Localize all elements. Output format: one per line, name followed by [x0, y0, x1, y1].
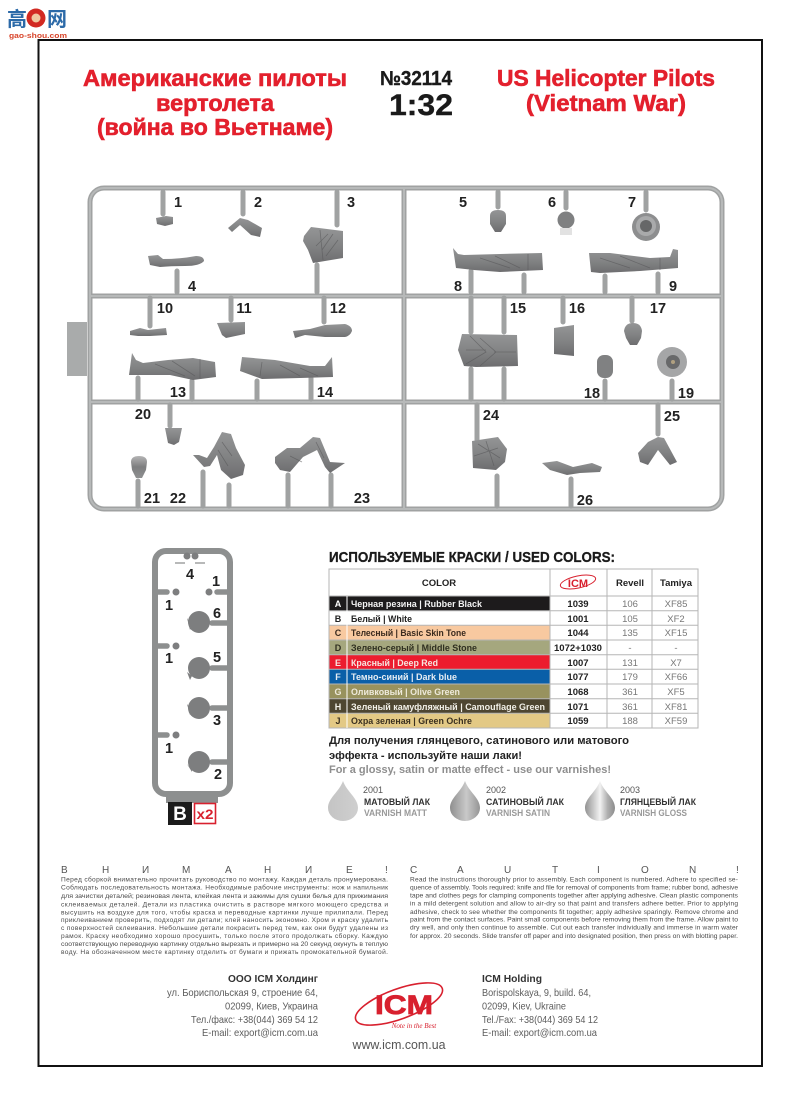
row B: [335, 614, 685, 625]
row G: XF5: [667, 687, 685, 698]
caution text: Russian: соответствующую переводную картинку отдельно вырезать и примерно на 20 секунд окунуть в теплую: [61, 941, 388, 948]
sprue letter B: B: [173, 804, 187, 825]
part numbers on main sprue: 10: [157, 301, 173, 317]
part numbers on main sprue: 17: [650, 301, 666, 317]
table header: ICM: [568, 578, 588, 590]
watermark logo: 高: [7, 7, 27, 31]
varnish satin: 2002: [486, 785, 506, 795]
row D: Зелено-серый | Middle Stone: [351, 643, 477, 654]
row H: [335, 702, 687, 713]
part 6 helmet: [558, 212, 574, 235]
row H: Зеленый камуфляжный | Camouflage Green: [351, 702, 545, 713]
varnish note: For a glossy, satin or matte effect - use our varnishes!: [329, 764, 611, 776]
caution text: English: I: [597, 865, 600, 876]
row D: -: [674, 643, 678, 654]
part numbers on main sprue: 15: [510, 301, 526, 317]
part 14 leg: [240, 357, 333, 379]
row H: XF81: [665, 702, 687, 713]
row A: [335, 599, 687, 610]
caution text: English: quence of assembly. Tools required: knife and file for removal of components from frame; rubber bond, adhesive: [410, 884, 738, 892]
part numbers on main sprue: 3: [347, 195, 355, 211]
sprue B: 5: [213, 650, 221, 666]
part 16 torso panel: [554, 325, 574, 356]
row J: Охра зеленая | Green Ochre: [351, 716, 472, 727]
row E: 131: [622, 658, 638, 669]
used colors heading: ИСПОЛЬЗУЕМЫЕ КРАСКИ / USED COLORS:: [329, 550, 615, 566]
part 7 hat: [632, 213, 660, 241]
caution text: Russian: !: [385, 865, 388, 876]
caution text: Russian: М: [182, 865, 190, 876]
table header: Revell: [616, 578, 644, 589]
title: Russian: Американские пилоты: [83, 65, 347, 91]
row H: 1071: [567, 702, 589, 713]
address: Russian: 02099, Киев, Украина: [225, 1000, 318, 1012]
caution text: Russian: И: [305, 865, 312, 876]
part numbers on main sprue: 22: [170, 491, 186, 507]
row F: 1077: [567, 672, 589, 683]
row C: Телесный | Basic Skin Tone: [351, 628, 466, 639]
caution text: Russian: приклеиванием проверить, подходят ли детали; клей наносить экономно. Хром и краску удалить: [61, 916, 389, 924]
part 25 arm: [638, 437, 677, 465]
address: English: ICM Holding: [482, 973, 542, 985]
part numbers on main sprue: 18: [584, 386, 600, 402]
part 19 hat: [657, 347, 687, 377]
title: English: [497, 65, 715, 116]
table header: COLOR: [422, 578, 456, 589]
part numbers on main sprue: 20: [135, 407, 151, 423]
row E: Красный | Deep Red: [351, 658, 438, 669]
varnish matt: VARNISH MATT: [364, 808, 427, 819]
varnish matt: [328, 781, 430, 821]
row H: H: [335, 702, 341, 712]
sprue B: 1: [165, 651, 173, 667]
sprue gates: [138, 192, 672, 506]
row H: 361: [622, 702, 638, 713]
caution text: English: T: [552, 865, 558, 876]
part numbers on main sprue: 21: [144, 491, 160, 507]
row D: [335, 643, 678, 654]
title: English: US Helicopter Pilots: [497, 65, 715, 91]
row F: XF66: [665, 672, 687, 683]
caution text: English: N: [689, 865, 696, 876]
part 24 torso: [472, 437, 507, 470]
part 5 head: [490, 210, 506, 232]
part numbers on main sprue: 2: [254, 195, 262, 211]
part numbers on main sprue: 6: [548, 195, 556, 211]
row D: 1072+1030: [554, 643, 602, 654]
address: Russian: E-mail: export@icm.com.ua: [202, 1027, 318, 1039]
part numbers on main sprue: 23: [354, 491, 370, 507]
title: Russian: [83, 65, 347, 140]
row A: A: [335, 599, 342, 609]
caution text: Russian: воду. На обозначенном месте картинку отделить от бумаги и прижать промокательной бумагой.: [61, 948, 388, 956]
part numbers on main sprue: 19: [678, 386, 694, 402]
row A: XF85: [665, 599, 687, 610]
row C: 135: [622, 628, 638, 639]
row J: J: [335, 716, 341, 726]
ICM logo: Note in the Best: [391, 1022, 437, 1030]
part 8 leg: [453, 248, 543, 272]
quantity x2: [194, 804, 216, 824]
varnish matt: МАТОВЫЙ ЛАК: [364, 796, 430, 808]
row G: Оливковый | Olive Green: [351, 687, 460, 698]
row A: 1039: [567, 599, 589, 610]
watermark logo: [7, 7, 67, 40]
row G: 1068: [567, 687, 589, 698]
part 15 torso: [458, 334, 518, 367]
row B: 105: [622, 614, 638, 625]
address: English: Borispolskaya, 9, build. 64,: [482, 987, 591, 999]
row F: Темно-синий | Dark blue: [351, 672, 457, 683]
part numbers on main sprue: 4: [188, 279, 196, 295]
caution text: English: C: [410, 865, 417, 876]
part numbers on main sprue: 9: [669, 279, 677, 295]
caution text: English: dry well, and only then continue to assemble. Cut out each transfer individually and immerse in warm water: [410, 924, 739, 932]
part 2 arm: [228, 218, 262, 237]
caution text: Russian: Соблюдать последовательность монтажа. Необходимые рабочие инструменты: нож и напильник: [61, 884, 388, 892]
caution text: Russian: Н: [264, 865, 271, 876]
row C: [335, 628, 687, 639]
address: Russian: ул. Бориспольская 9, строение 64,: [167, 987, 318, 999]
ICM logo: ICM: [375, 990, 433, 1020]
part 11 cuff: [217, 322, 245, 338]
caution text: Russian: Перед сборкой внимательно прочитать руководство по монтажу. Каждая деталь пронумерована.: [61, 876, 388, 884]
caution text: English: Read the instructions thoroughly prior to assembly. Each component is numbered. Adhere to specified se-: [410, 876, 738, 884]
caution text: Russian: с поверхностей склеивания. Небольшие детали покрасить перед тем, как они будут удалены из: [61, 924, 388, 932]
watermark logo: 网: [47, 9, 67, 31]
title: Russian: (война во Вьетнаме): [97, 114, 333, 140]
title: kit number and scale: [380, 68, 453, 122]
title: kit number and scale: №32114: [380, 68, 453, 90]
ICM logo: [351, 974, 447, 1034]
caution text: English: O: [641, 865, 649, 876]
sprue B: 1: [165, 598, 173, 614]
caution text: Russian: склеиваемых деталей. Детали из пластика очистить в растворе мягкого моющего средства и: [61, 900, 388, 908]
row E: [335, 658, 682, 669]
part 18 helmet: [597, 355, 613, 378]
part 17 head: [624, 323, 642, 345]
part 4 arm: [148, 255, 204, 267]
caution text: English: adhesive, check to see whether the components fit together; apply adhesive sparingly. Remove chrome and: [410, 909, 738, 916]
row J: 1059: [567, 716, 589, 727]
address: English: E-mail: export@icm.com.ua: [482, 1027, 597, 1039]
quantity x2: x2: [196, 806, 214, 822]
row E: E: [335, 658, 341, 668]
part numbers on main sprue: 8: [454, 279, 462, 295]
website: www.icm.com.ua: [352, 1037, 446, 1052]
caution text: English: paint from the contact surfaces. Paint small components before removing them from the frame. Allow paint to: [410, 916, 738, 924]
row E: 1007: [567, 658, 589, 669]
sprue B: 3: [213, 713, 221, 729]
row D: D: [335, 643, 342, 653]
row G: G: [334, 687, 342, 697]
part 10 hand and forearm: [130, 328, 167, 336]
sprue B: 4: [186, 567, 194, 583]
row C: XF15: [665, 628, 687, 639]
sprue B: [155, 551, 230, 825]
sprue B: 1: [212, 574, 220, 590]
row B: Белый | White: [351, 614, 412, 625]
part numbers on main sprue: [135, 195, 694, 509]
part numbers on main sprue: 26: [577, 493, 593, 509]
caution text: English: !: [736, 865, 739, 876]
address: English: 02099, Kiev, Ukraine: [482, 1000, 566, 1012]
address: Russian: Тел./факс: +38(044) 369 54 12: [191, 1014, 318, 1026]
part numbers on main sprue: 24: [483, 408, 499, 424]
part numbers on main sprue: 13: [170, 385, 186, 401]
title: kit number and scale: 1:32: [389, 89, 453, 122]
row B: B: [335, 614, 342, 624]
part numbers on main sprue: 1: [174, 195, 182, 211]
watermark logo: gao-shou.com: [9, 31, 67, 40]
varnish satin: VARNISH SATIN: [486, 808, 550, 819]
address: English: [482, 973, 598, 1039]
varnish gloss: VARNISH GLOSS: [620, 808, 687, 819]
table header: [422, 572, 693, 592]
row D: -: [628, 643, 632, 654]
part 26 arm: [542, 461, 602, 475]
caution text: Russian: И: [142, 865, 149, 876]
varnish gloss: ГЛЯНЦЕВЫЙ ЛАК: [620, 796, 696, 808]
varnish matt: 2001: [363, 785, 383, 795]
caution text: English: U: [504, 865, 511, 876]
caution text: Russian: для зачистки деталей; резиновая лента, клейкая лента и зажимы для сушки белья для прижимания: [61, 892, 388, 900]
caution text: English: tape and clothes pegs for clamping components together after applying adhesive. Clean plastic components: [410, 892, 739, 900]
part 13 leg: [129, 353, 216, 380]
varnish gloss: [585, 781, 696, 821]
part numbers on main sprue: 25: [664, 409, 680, 425]
part 21 helmet: [131, 456, 147, 478]
caution text: Russian: Е: [346, 865, 353, 876]
part 9 leg: [589, 249, 678, 273]
caution text: Russian: Н: [102, 865, 109, 876]
address: Russian: ООО ICM Холдинг: [228, 973, 319, 985]
part 3 torso: [303, 227, 343, 263]
caution text: English: [410, 865, 739, 940]
row B: 1001: [567, 614, 589, 625]
sprue B: 6: [213, 606, 221, 622]
varnish note: эффекта - используйте наши лаки!: [329, 750, 522, 762]
main sprue frame: [67, 188, 722, 509]
row G: [334, 687, 685, 698]
row J: XF59: [665, 716, 687, 727]
part numbers on main sprue: 12: [330, 301, 346, 317]
part numbers on main sprue: 5: [459, 195, 467, 211]
part 1 hand: [156, 216, 173, 226]
row F: F: [335, 672, 341, 682]
varnish note: [329, 735, 629, 776]
sprue letter B: [168, 802, 192, 825]
caution text: Russian: высушить на воздухе для того, чтобы краска и переводные картинки лучше прилипали. Перед: [61, 908, 388, 916]
caution text: Russian: А: [225, 865, 232, 876]
part numbers on main sprue: 11: [236, 301, 252, 317]
part 23 seated legs: [275, 437, 345, 473]
part numbers on main sprue: 16: [569, 301, 585, 317]
table header: Tamiya: [660, 578, 693, 589]
caution text: Russian: [61, 865, 389, 956]
title: Russian: вертолета: [156, 90, 274, 116]
sprue B: 1: [165, 741, 173, 757]
row A: Черная резина | Rubber Black: [351, 599, 483, 610]
caution text: English: in a mild detergent solution and allow to air-dry so that paint and transfers adhere better. Prior to applying: [410, 900, 738, 908]
part 12 arm: [293, 324, 352, 338]
varnish note: Для получения глянцевого, сатинового или матового: [329, 735, 629, 747]
part numbers on main sprue: 7: [628, 195, 636, 211]
address: Russian: [167, 973, 319, 1039]
row B: XF2: [667, 614, 685, 625]
part 22 seated legs: [193, 432, 245, 479]
part 20 jaw: [165, 428, 182, 445]
row G: 361: [622, 687, 638, 698]
varnish satin: [450, 781, 564, 821]
caution text: English: for approx. 20 seconds. Slide transfer off paper and into designated position, then press on with blotting paper.: [410, 933, 738, 940]
address: English: Tel./Fax: +38(044) 369 54 12: [482, 1014, 598, 1026]
colors table: [329, 569, 698, 728]
varnish gloss: 2003: [620, 785, 640, 795]
caution text: Russian: рамок. Краску необходимо хорошо просушить, только после этого продолжать сборку. Каждую: [61, 932, 388, 940]
row J: 188: [622, 716, 638, 727]
row F: [335, 672, 687, 683]
row F: 179: [622, 672, 638, 683]
title: English: (Vietnam War): [526, 90, 686, 116]
caution text: English: A: [457, 865, 464, 876]
caution text: Russian: В: [61, 865, 68, 876]
varnish satin: САТИНОВЫЙ ЛАК: [486, 796, 564, 808]
row colour swatches: [329, 596, 550, 728]
part numbers on main sprue: 14: [317, 385, 333, 401]
row E: X7: [670, 658, 682, 669]
row J: [335, 716, 687, 727]
row C: 1044: [567, 628, 589, 639]
sprue B: 2: [214, 767, 222, 783]
row C: C: [335, 628, 342, 638]
row A: 106: [622, 599, 638, 610]
